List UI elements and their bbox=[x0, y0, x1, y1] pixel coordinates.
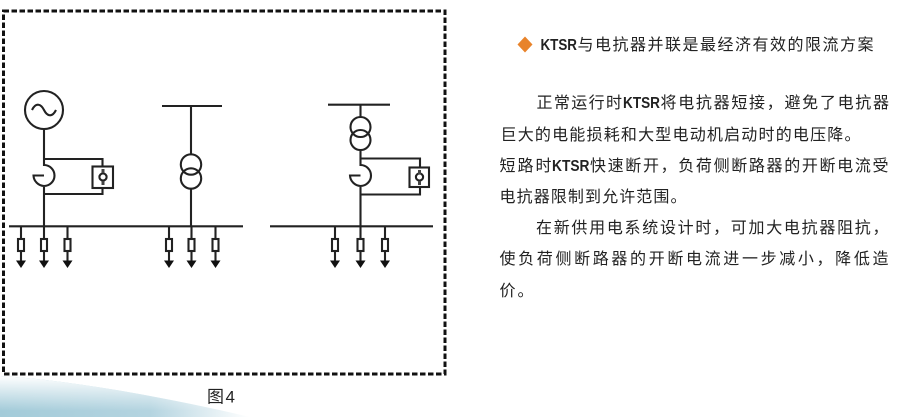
body text: 快速断开，负荷侧断路器的开断电流受 bbox=[590, 157, 888, 175]
feeders bbox=[335, 226, 385, 261]
body text: 电抗器限制到允许范围。 bbox=[500, 188, 686, 206]
figure caption: 图4 bbox=[207, 388, 235, 406]
body text: 使负荷侧断路器的开断电流进一步减小，降低造 bbox=[500, 250, 888, 268]
body text: KTSR bbox=[623, 95, 660, 112]
heading: 与电抗器并联是最经济有效的限流方案 bbox=[578, 36, 874, 54]
body text bbox=[500, 94, 889, 300]
body text: 巨大的电能损耗和大型电动机启动时的电压降。 bbox=[500, 126, 860, 144]
feeders bbox=[21, 226, 68, 261]
dashed frame bbox=[4, 11, 445, 374]
body text: 短路时 bbox=[500, 157, 552, 175]
top busbar bbox=[328, 105, 390, 117]
body text: 将电抗器短接，避免了电抗器 bbox=[660, 94, 889, 112]
busbar bbox=[270, 225, 433, 227]
body text: 正常运行时 bbox=[536, 94, 622, 112]
icon: KTSR switch bbox=[410, 168, 429, 187]
icon: transformer bbox=[181, 154, 201, 189]
wiring and reactor bbox=[34, 129, 102, 226]
fuses bbox=[332, 239, 388, 251]
main busbar left bbox=[9, 225, 243, 227]
top busbar bbox=[162, 106, 222, 226]
fuses bbox=[166, 239, 218, 251]
diagram: transformer with reactor circuit bbox=[270, 105, 433, 268]
icon: KTSR switch bbox=[92, 166, 113, 188]
diagram: generator circuit bbox=[16, 91, 113, 268]
icon: transformer bbox=[350, 117, 370, 150]
wiring and reactor bbox=[350, 150, 420, 226]
body text: 价。 bbox=[500, 283, 534, 300]
icon: generator bbox=[25, 91, 63, 129]
background swoosh bbox=[0, 376, 250, 417]
heading: KTSR bbox=[540, 37, 577, 54]
body text: KTSR bbox=[552, 158, 590, 175]
body text: 在新供用电系统设计时，可加大电抗器阻抗， bbox=[536, 219, 888, 237]
fuses bbox=[18, 239, 70, 251]
icon: orange diamond bbox=[518, 36, 532, 52]
feeders bbox=[169, 226, 216, 261]
diagram: transformer circuit bbox=[162, 106, 222, 268]
arrows bbox=[164, 260, 220, 268]
arrows bbox=[16, 260, 72, 268]
arrows bbox=[330, 260, 390, 268]
